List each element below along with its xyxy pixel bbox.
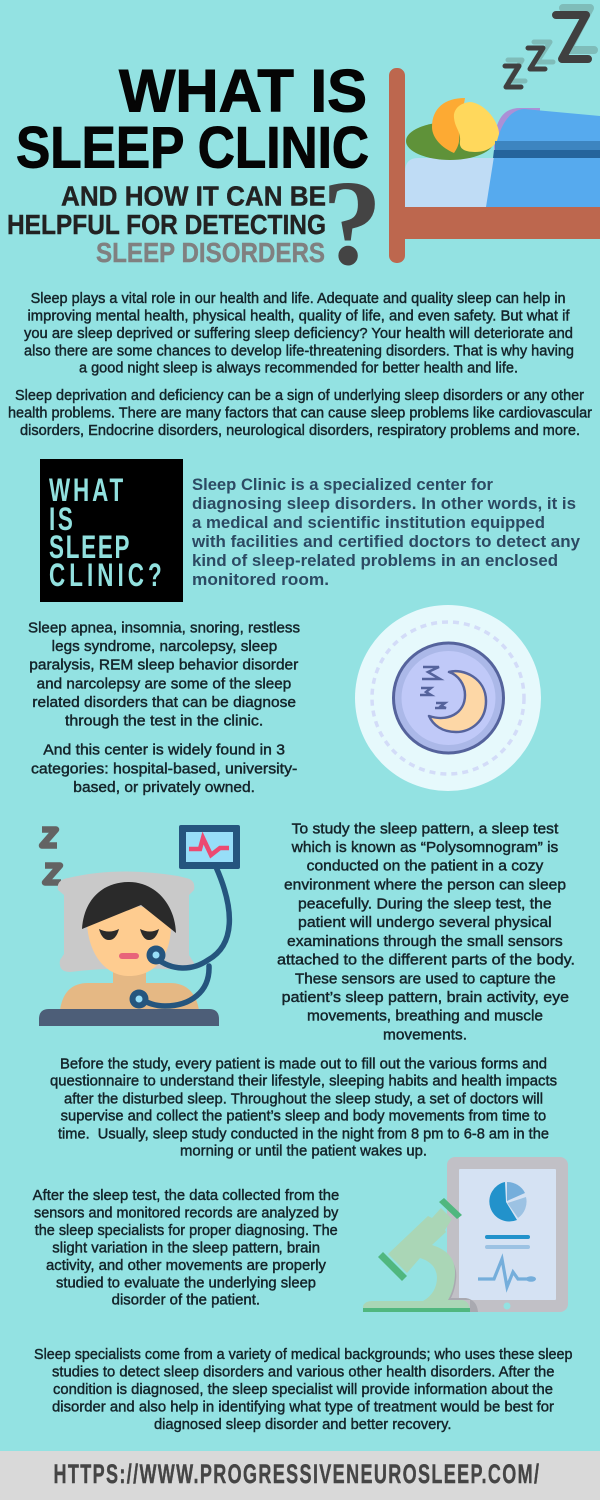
disorders text: related disorders that can be diagnose <box>32 695 296 711</box>
polysomnogram text: movements, breathing and muscle <box>307 1009 543 1025</box>
categories text: categories: hospital-based, university- <box>31 761 297 777</box>
intro text two: health problems. There are many factors that can cause sleep problems like cardiovascular <box>8 406 592 422</box>
study procedure text: after the disturbed sleep. Throughout the sleep study, a set of doctors will <box>64 1091 543 1107</box>
panel: what is sleep clinic label: SLEEP <box>49 529 129 565</box>
intro text: a good night sleep is always recommended for better health and life. <box>79 360 518 376</box>
disorders text: paralysis, REM sleep behavior disorder <box>29 658 298 674</box>
polysomnogram text: To study the sleep pattern, a sleep test <box>292 821 558 837</box>
study procedure text: time. Usually, sleep study conducted in the night from 8 pm to 6-8 am in the <box>58 1126 549 1142</box>
closing text: diagnosed sleep disorder and better recovery. <box>154 1417 452 1433</box>
question mark: ? <box>322 156 382 291</box>
intro text two: Sleep deprivation and deficiency can be a sign of underlying sleep disorders or any other <box>15 388 584 404</box>
polysomnogram text: peacefully. During the sleep test, the <box>298 896 552 912</box>
intro text two <box>8 388 592 439</box>
icon: z letters <box>42 830 61 882</box>
analysis text: studied to evaluate the underlying sleep <box>56 1275 316 1291</box>
study procedure text <box>50 1056 557 1160</box>
study procedure text: supervise and collect the patient’s sleep and body movements from time to <box>61 1109 546 1125</box>
footer bar with url <box>0 1451 600 1500</box>
panel: what is sleep clinic label <box>40 459 183 602</box>
categories text <box>31 742 297 796</box>
panel: what is sleep clinic label: WHAT <box>49 472 123 508</box>
intro text: Sleep plays a vital role in our health and life. Adequate and quality sleep can help in <box>31 291 566 307</box>
subtitle <box>7 180 326 268</box>
polysomnogram text: environment where the person can sleep <box>284 878 566 894</box>
footer bar with url: HTTPS://WWW.PROGRESSIVENEUROSLEEP.COM/ <box>54 1458 540 1489</box>
closing text: studies to detect sleep disorders and various other health disorders. After the <box>52 1364 554 1380</box>
analysis text: activity, and other movements are properly <box>46 1258 327 1274</box>
study procedure text: questionnaire to understand their lifestyle, sleeping habits and health impacts <box>50 1074 557 1090</box>
subtitle: SLEEP DISORDERS <box>96 237 325 268</box>
definition text: monitored room. <box>192 571 329 589</box>
icon: moon badge <box>355 605 541 791</box>
icon: tablet and microscope <box>363 1157 568 1312</box>
panel: what is sleep clinic label: CLINIC? <box>49 557 162 593</box>
definition text: a medical and scientific institution equipped <box>192 514 545 532</box>
polysomnogram text: movements. <box>383 1027 467 1043</box>
intro text: also there are some chances to develop life-threatening disorders. That is why having <box>24 344 574 360</box>
icon: patient with monitor <box>39 825 240 1026</box>
subtitle: AND HOW IT CAN BE <box>61 180 326 212</box>
panel: what is sleep clinic label: IS <box>49 501 73 537</box>
disorders text: and narcolepsy are some of the sleep <box>37 676 291 692</box>
disorders text <box>28 620 300 730</box>
polysomnogram text: which is known as “Polysomnogram” is <box>291 840 558 856</box>
study procedure text: Before the study, every patient is made out to fill out the various forms and <box>60 1056 547 1072</box>
analysis text: sensors and monitored records are analyzed by <box>34 1206 339 1222</box>
closing text: disorder and also help in identifying what type of treatment would be best for <box>52 1400 554 1416</box>
polysomnogram text: patient’s sleep pattern, brain activity, eye <box>282 990 569 1006</box>
intro text: improving mental health, physical health, quality of life, and even safety. But what if <box>28 308 570 324</box>
icon: zzz <box>505 8 594 87</box>
polysomnogram text <box>277 821 575 1043</box>
icon: bed with sleeper <box>389 8 600 263</box>
subtitle: HELPFUL FOR DETECTING <box>7 209 326 240</box>
definition text: with facilities and certified doctors to detect any <box>191 533 581 551</box>
categories text: based, or privately owned. <box>73 780 255 796</box>
analysis text <box>33 1188 339 1309</box>
analysis text: After the sleep test, the data collected from the <box>33 1188 339 1204</box>
polysomnogram text: patient will undergo several physical <box>298 915 552 931</box>
definition text <box>191 476 581 589</box>
closing text: condition is diagnosed, the sleep specialist will provide information about the <box>53 1382 553 1398</box>
analysis text: disorder of the patient. <box>112 1293 260 1309</box>
analysis text: the sleep specialists for proper diagnosing. The <box>35 1223 338 1239</box>
disorders text: Sleep apnea, insomnia, snoring, restless <box>28 620 300 636</box>
title: SLEEP CLINIC <box>16 116 369 180</box>
disorders text: legs syndrome, narcolepsy, sleep <box>52 639 277 655</box>
definition text: Sleep Clinic is a specialized center for <box>192 476 494 494</box>
intro text: you are sleep deprived or suffering sleep deficiency? Your health will deteriorate and <box>24 326 573 342</box>
chart: pie <box>489 1182 527 1222</box>
closing text <box>34 1347 572 1433</box>
categories text: And this center is widely found in 3 <box>43 742 285 758</box>
intro text <box>24 291 574 376</box>
title: WHAT IS <box>119 58 367 124</box>
closing text: Sleep specialists come from a variety of medical backgrounds; who uses these sleep <box>34 1347 572 1363</box>
study procedure text: morning or until the patient wakes up. <box>180 1144 427 1160</box>
title <box>16 58 369 180</box>
definition text: kind of sleep-related problems in an enclosed <box>192 552 558 570</box>
polysomnogram text: conducted on the patient in a cozy <box>307 859 544 875</box>
disorders text: through the test in the clinic. <box>65 714 263 730</box>
analysis text: slight variation in the sleep pattern, brain <box>52 1240 320 1256</box>
polysomnogram text: attached to the different parts of the body. <box>277 953 575 969</box>
polysomnogram text: examinations through the small sensors <box>287 934 563 950</box>
intro text two: disorders, Endocrine disorders, neurological disorders, respiratory problems and more. <box>20 423 580 439</box>
polysomnogram text: These sensors are used to capture the <box>295 971 556 987</box>
definition text: diagnosing sleep disorders. In other words, it is <box>192 495 576 513</box>
